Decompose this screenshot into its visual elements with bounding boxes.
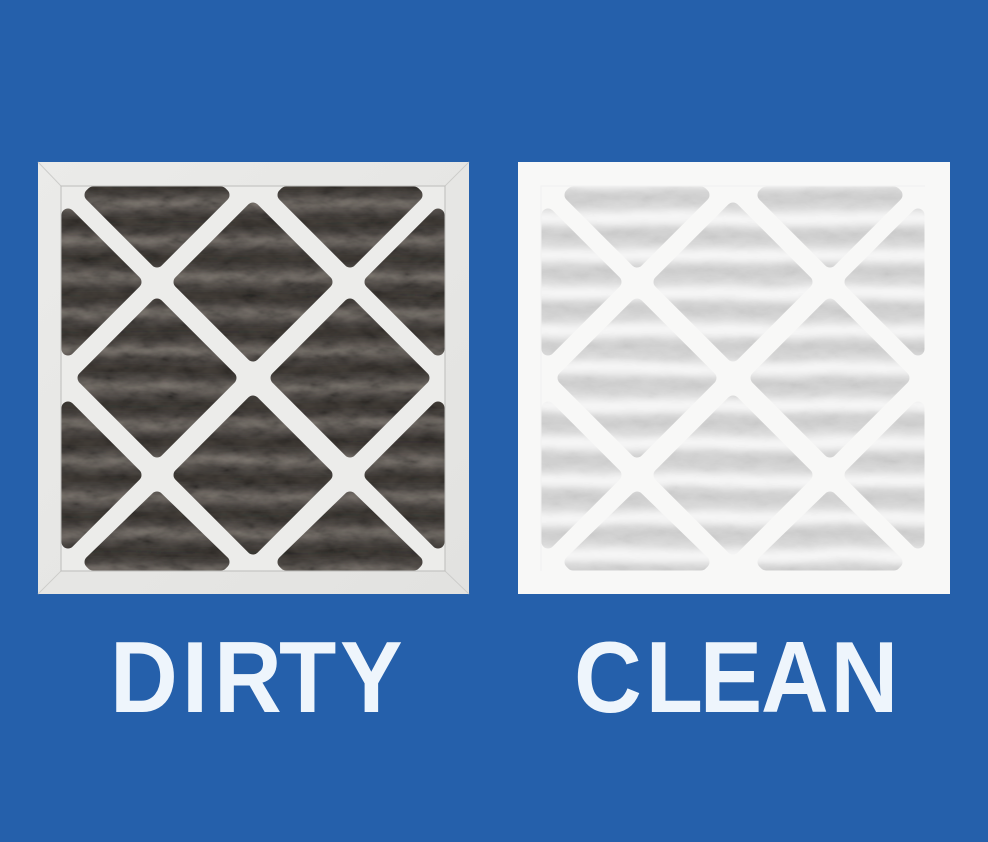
frame: dirty filter cardboard border — [38, 162, 469, 594]
frame: clean filter white border — [518, 162, 950, 594]
infographic: dirty vs clean air filter — [38, 162, 950, 713]
dirty pleated filter media seen through the lattice — [62, 186, 444, 570]
clean pleated filter media seen through the lattice — [542, 186, 924, 570]
label: DIRTY: DIRTY — [110, 621, 403, 734]
panel: clean filter — [518, 162, 950, 594]
label: CLEAN: CLEAN — [574, 621, 898, 734]
panel: dirty filter — [38, 162, 469, 594]
